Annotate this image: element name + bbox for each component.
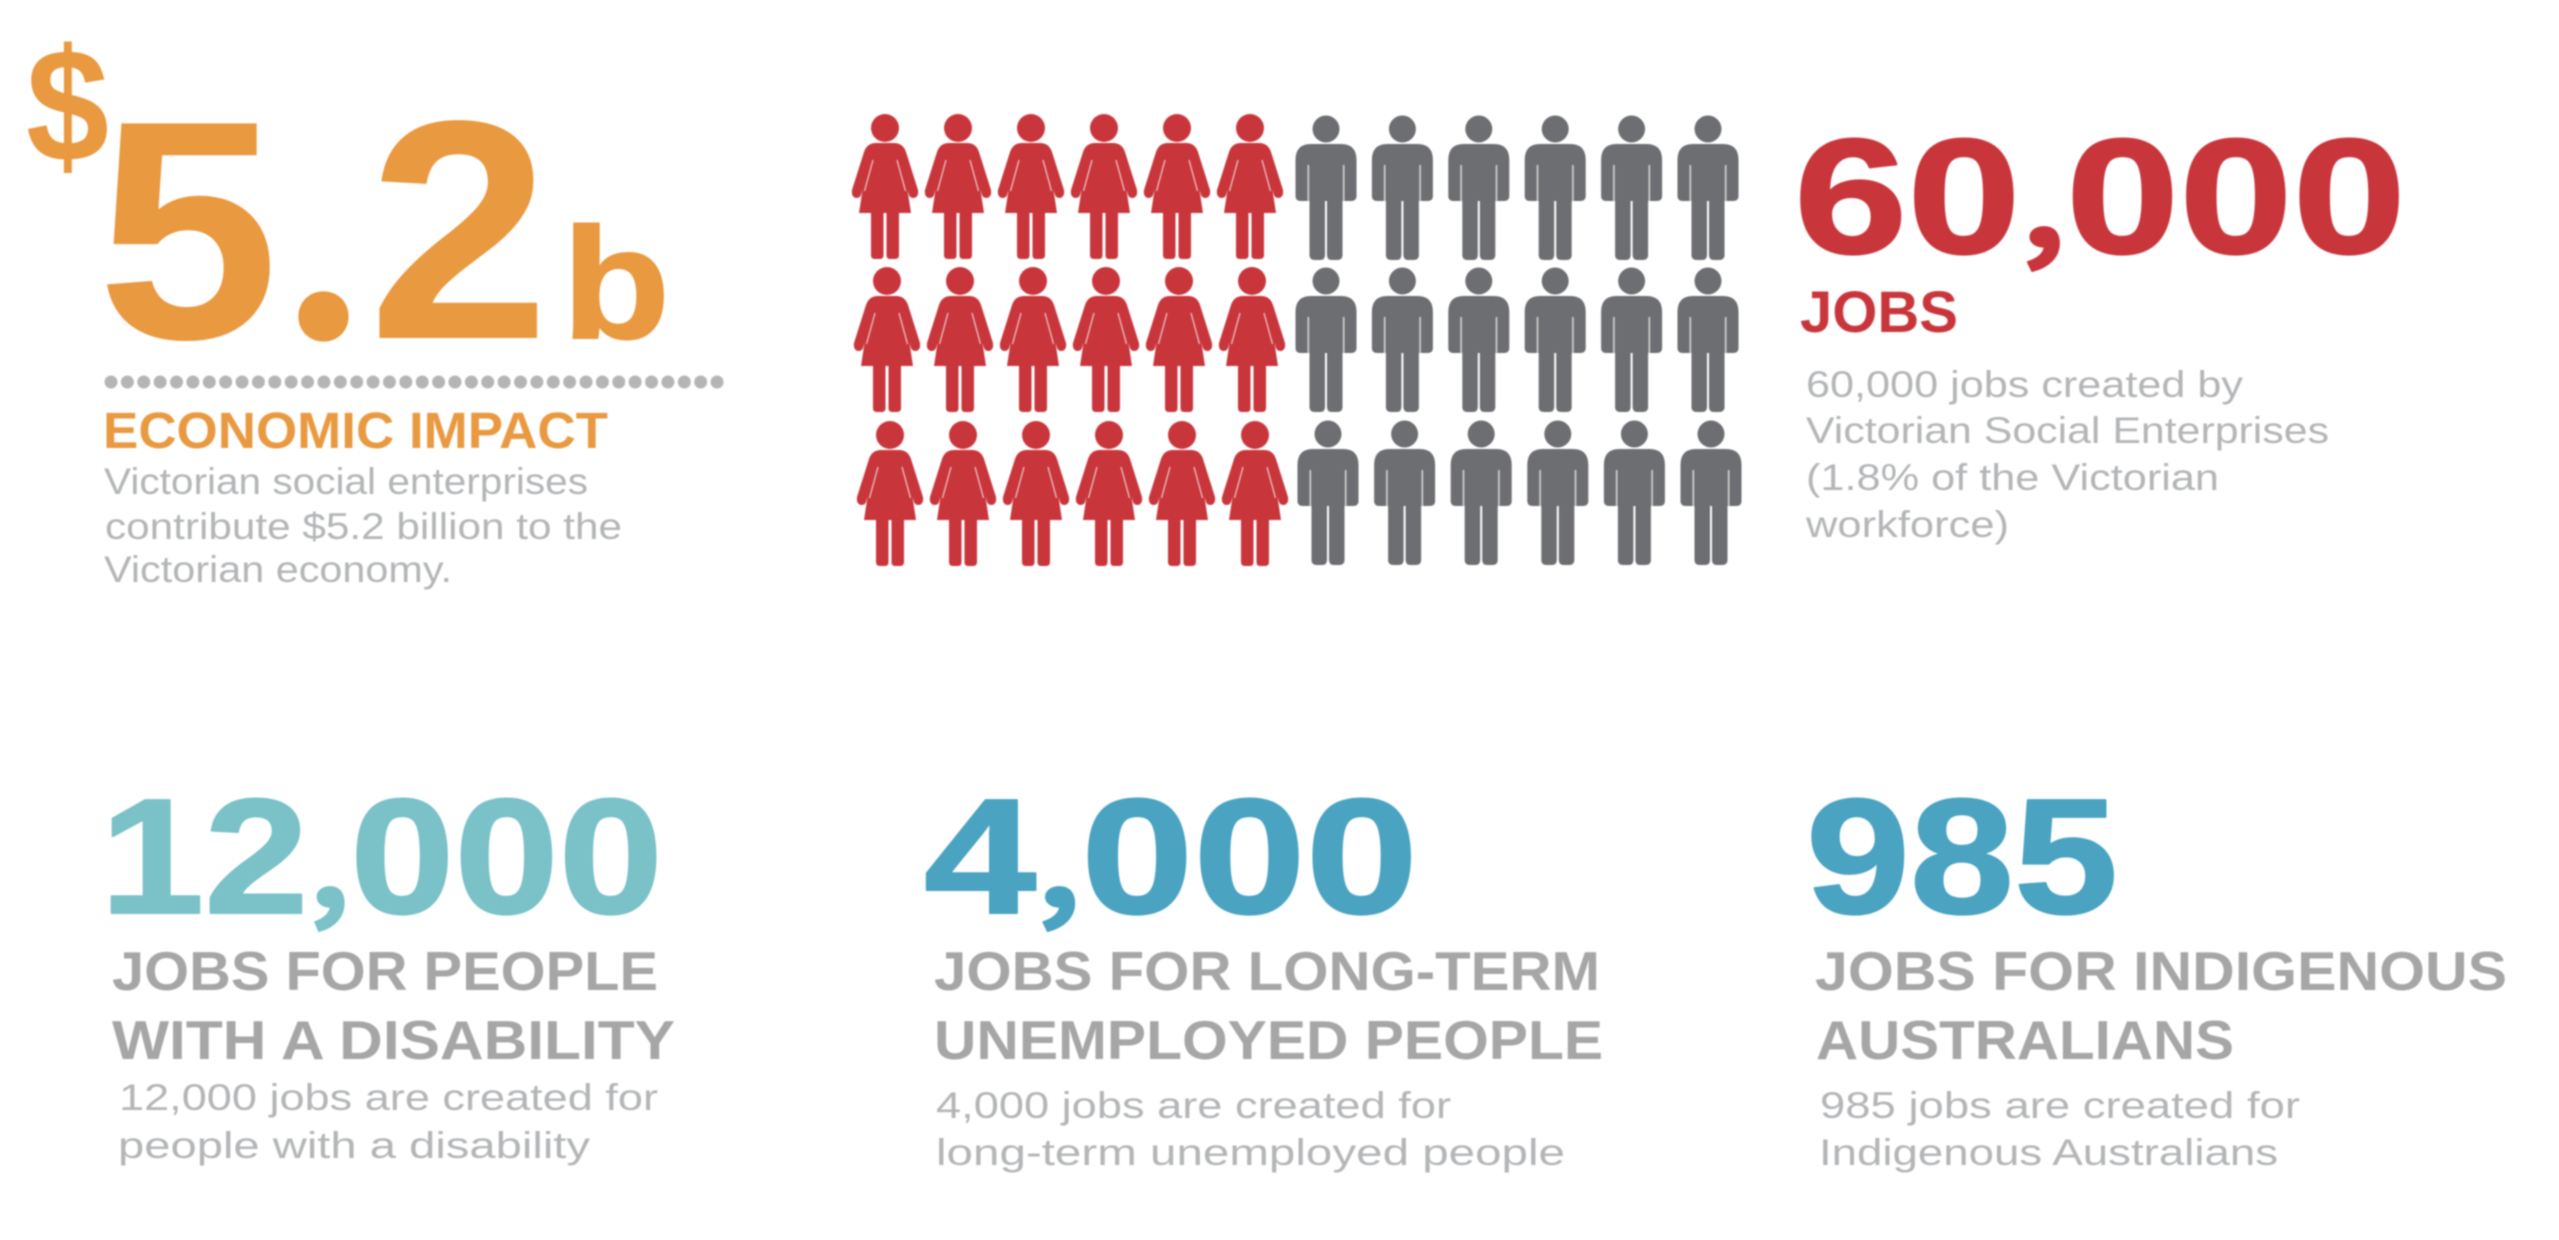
description: economic impact: Victorian economy. xyxy=(104,549,452,590)
women row 1 xyxy=(852,114,1283,259)
description: jobs xyxy=(1805,364,2329,545)
description: jobs: 60,000 jobs created by xyxy=(1806,364,2244,405)
men row 1 xyxy=(1296,116,1738,260)
figure: 4,000: 000 xyxy=(1081,765,1418,948)
heading: jobs: JOBS xyxy=(1800,280,1958,345)
description: disability: people with a disability xyxy=(118,1125,591,1166)
description: economic impact: Victorian social enterprises xyxy=(104,461,588,502)
heading: long-term unemployed xyxy=(934,940,1603,1071)
figure: 5.2: 5.2 xyxy=(97,35,550,414)
description: Indigenous Australians: 985 jobs are created for xyxy=(1820,1085,2300,1126)
panel: 985 jobs for Indigenous Australians xyxy=(1806,765,2507,1173)
description: jobs: (1.8% of the Victorian xyxy=(1806,457,2219,498)
figure suffix: b: b xyxy=(562,196,670,372)
heading: long-term unemployed: UNEMPLOYED PEOPLE xyxy=(934,1009,1603,1071)
panel: 60,000 jobs xyxy=(1794,105,2406,545)
heading: Indigenous Australians: JOBS FOR INDIGENOUS xyxy=(1815,940,2507,1002)
men row 3 xyxy=(1298,420,1742,565)
description: disability xyxy=(118,1077,658,1166)
women row 2 xyxy=(854,267,1285,412)
figure: 4,000: , xyxy=(1036,778,1081,940)
heading: people with a disability: JOBS FOR PEOPLE xyxy=(112,940,658,1002)
description: disability: 12,000 jobs are created for xyxy=(119,1077,658,1118)
description: economic impact: contribute $5.2 billion to the xyxy=(105,506,622,547)
heading: Indigenous Australians xyxy=(1815,940,2507,1071)
figure: 60,000: , xyxy=(2021,118,2066,280)
pictogram: women and men xyxy=(852,114,1742,566)
description: long-term unemployed: long-term unemployed people xyxy=(936,1132,1565,1173)
description: Indigenous Australians xyxy=(1819,1085,2300,1173)
description: long-term unemployed xyxy=(936,1085,1565,1173)
panel: economic impact xyxy=(26,16,718,590)
figure: 12,000: 12 xyxy=(100,765,282,948)
heading: Indigenous Australians: AUSTRALIANS xyxy=(1816,1009,2234,1071)
figure: 60,000: 60 xyxy=(1794,105,1976,288)
heading: long-term unemployed: JOBS FOR LONG-TERM xyxy=(934,940,1600,1002)
figure: 12,000: , xyxy=(309,778,350,940)
dotted divider xyxy=(111,376,718,388)
figure: 985: 985 xyxy=(1806,765,2118,948)
figure: 4,000: 4 xyxy=(924,765,1015,948)
men row 2 xyxy=(1296,268,1738,412)
description: economic impact xyxy=(104,461,622,590)
description: jobs: Victorian Social Enterprises xyxy=(1806,410,2329,451)
description: jobs: workforce) xyxy=(1805,504,2009,545)
figure: 60,000: 000 xyxy=(2066,105,2406,288)
panel: 4,000 jobs for long-term unemployed people xyxy=(924,765,1603,1173)
dollar sign: $ xyxy=(26,16,109,196)
heading: people with a disability: WITH A DISABILITY xyxy=(112,1009,675,1071)
women row 3 xyxy=(857,421,1288,566)
figure: 12,000: 000 xyxy=(350,765,663,948)
heading: people with a disability xyxy=(112,940,675,1071)
description: long-term unemployed: 4,000 jobs are created for xyxy=(936,1085,1451,1126)
panel: 12,000 jobs for people with a disability xyxy=(100,765,675,1166)
heading: economic impact: ECONOMIC IMPACT xyxy=(103,402,608,459)
description: Indigenous Australians: Indigenous Australians xyxy=(1819,1132,2278,1173)
